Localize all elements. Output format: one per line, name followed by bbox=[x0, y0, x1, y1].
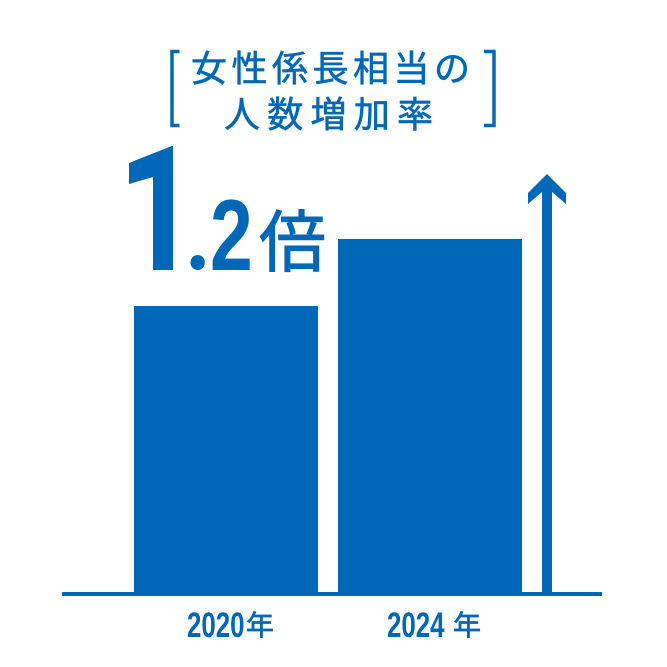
bar chart bbox=[62, 174, 602, 645]
label: 2024 bbox=[387, 605, 481, 645]
digit 1: 1 bbox=[122, 107, 184, 308]
title line 1: 女性係長相当の bbox=[191, 48, 470, 89]
title bbox=[172, 48, 494, 135]
baseline axis bbox=[62, 592, 602, 596]
left bracket bbox=[172, 52, 180, 126]
decimal point: . bbox=[185, 180, 210, 292]
title line 2: 人数増加率 bbox=[224, 94, 433, 135]
bar: 2020 bbox=[134, 306, 318, 594]
label: 2020: 2020 bbox=[187, 605, 245, 645]
digit 2: 2 bbox=[210, 180, 253, 293]
label: 2020: 年 bbox=[246, 610, 274, 641]
label: 2020 bbox=[187, 605, 274, 645]
label: 2024: 年 bbox=[453, 610, 481, 641]
right bracket bbox=[484, 52, 494, 126]
multiplier unit: 倍 bbox=[259, 206, 326, 281]
bar: 2024 bbox=[338, 239, 522, 594]
headline value: 1.2 times bbox=[129, 146, 324, 272]
icon: up arrow bbox=[528, 174, 566, 594]
label: 2024: 2024 bbox=[387, 605, 445, 645]
